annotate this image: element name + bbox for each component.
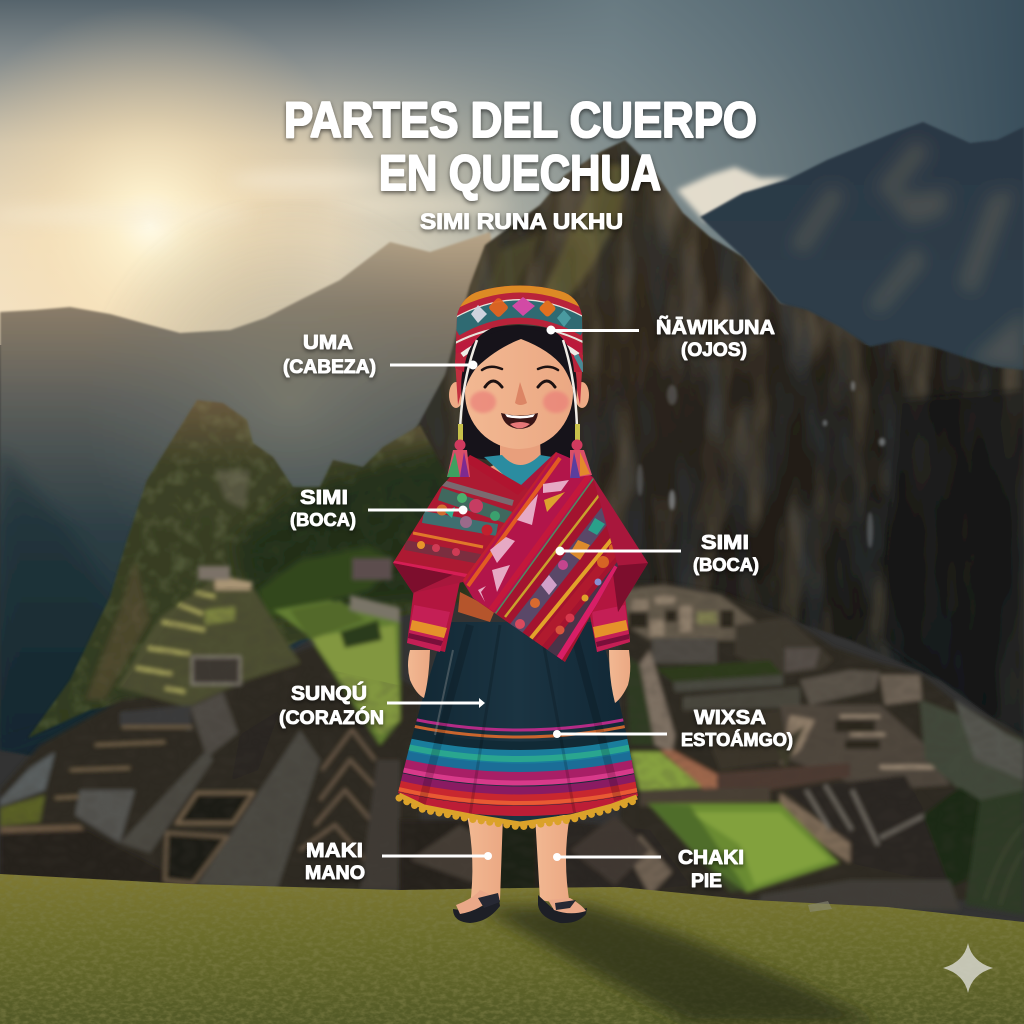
poncho left collar band <box>466 455 525 495</box>
label: simi right <box>556 532 759 575</box>
neck and collar <box>484 440 556 490</box>
label: simi left: (BOCA) <box>290 510 356 530</box>
hair fringe <box>461 328 577 402</box>
label: wixsa: ESTOÁMGO) <box>681 729 793 750</box>
mountain: Huayna Picchu <box>20 390 470 740</box>
label: chaki <box>553 847 744 892</box>
ears <box>449 382 589 408</box>
hat side flaps <box>455 345 583 405</box>
hat <box>447 286 592 478</box>
hair back <box>462 325 578 462</box>
label: nawikuna: (OJOS) <box>681 340 747 361</box>
label: wixsa: WIXSA <box>694 707 766 729</box>
cheeks <box>470 391 569 413</box>
skirt <box>390 622 650 827</box>
sky <box>0 0 1024 400</box>
label: sunqu: (CORAZÓN <box>279 707 384 729</box>
foreground grass <box>0 870 1024 1024</box>
label: uma <box>283 332 478 378</box>
label: chaki: CHAKI <box>678 847 744 869</box>
nose <box>515 382 527 405</box>
title: EN QUECHUA <box>379 145 661 201</box>
label: uma: (CABEZA) <box>283 357 376 378</box>
poncho left panel <box>393 455 530 578</box>
face <box>461 328 577 449</box>
label: sunqu <box>279 681 485 729</box>
mountain: central peak <box>380 130 1024 750</box>
mouth <box>501 413 538 429</box>
label: nawikuna: ÑĀWIKUNA <box>656 316 775 339</box>
label: maki <box>305 840 492 884</box>
label: simi right: SIMI <box>701 532 749 554</box>
label: chaki: PIE <box>691 871 722 892</box>
label: simi left <box>290 487 468 530</box>
title block <box>284 92 757 234</box>
mountain: far right peak <box>700 122 1024 380</box>
label: uma: UMA <box>303 332 353 354</box>
hands <box>408 650 630 703</box>
waist sash <box>458 592 495 622</box>
label: sunqu: SUNQÚ <box>291 681 367 705</box>
sleeves <box>407 565 630 652</box>
lace trim <box>399 795 637 827</box>
label: wixsa <box>553 707 793 750</box>
title <box>284 92 757 201</box>
girl character <box>390 286 650 923</box>
mountain: distant ridge left <box>0 200 520 770</box>
label: simi right: (BOCA) <box>693 555 759 575</box>
ruins: right side citadel and plazas <box>400 583 1024 915</box>
poncho right panel <box>474 477 618 662</box>
ruins: left terraces and walls <box>0 558 420 890</box>
title: PARTES DEL CUERPO <box>284 92 757 148</box>
label: nawikuna <box>546 316 775 361</box>
ruins texture <box>164 586 914 853</box>
poncho <box>393 452 648 662</box>
poncho lapel <box>463 452 593 613</box>
label: maki: MANO <box>305 863 365 884</box>
label: maki: MAKI <box>306 840 363 862</box>
sandals <box>453 890 587 923</box>
hat ties and tassels <box>447 340 592 478</box>
legs <box>467 815 570 905</box>
label: simi left: SIMI <box>300 487 348 509</box>
icon: sparkle star <box>943 943 993 993</box>
subtitle: SIMI RUNA UKHU <box>420 209 623 234</box>
eyes and brows <box>482 367 558 387</box>
green plaza <box>647 803 840 893</box>
